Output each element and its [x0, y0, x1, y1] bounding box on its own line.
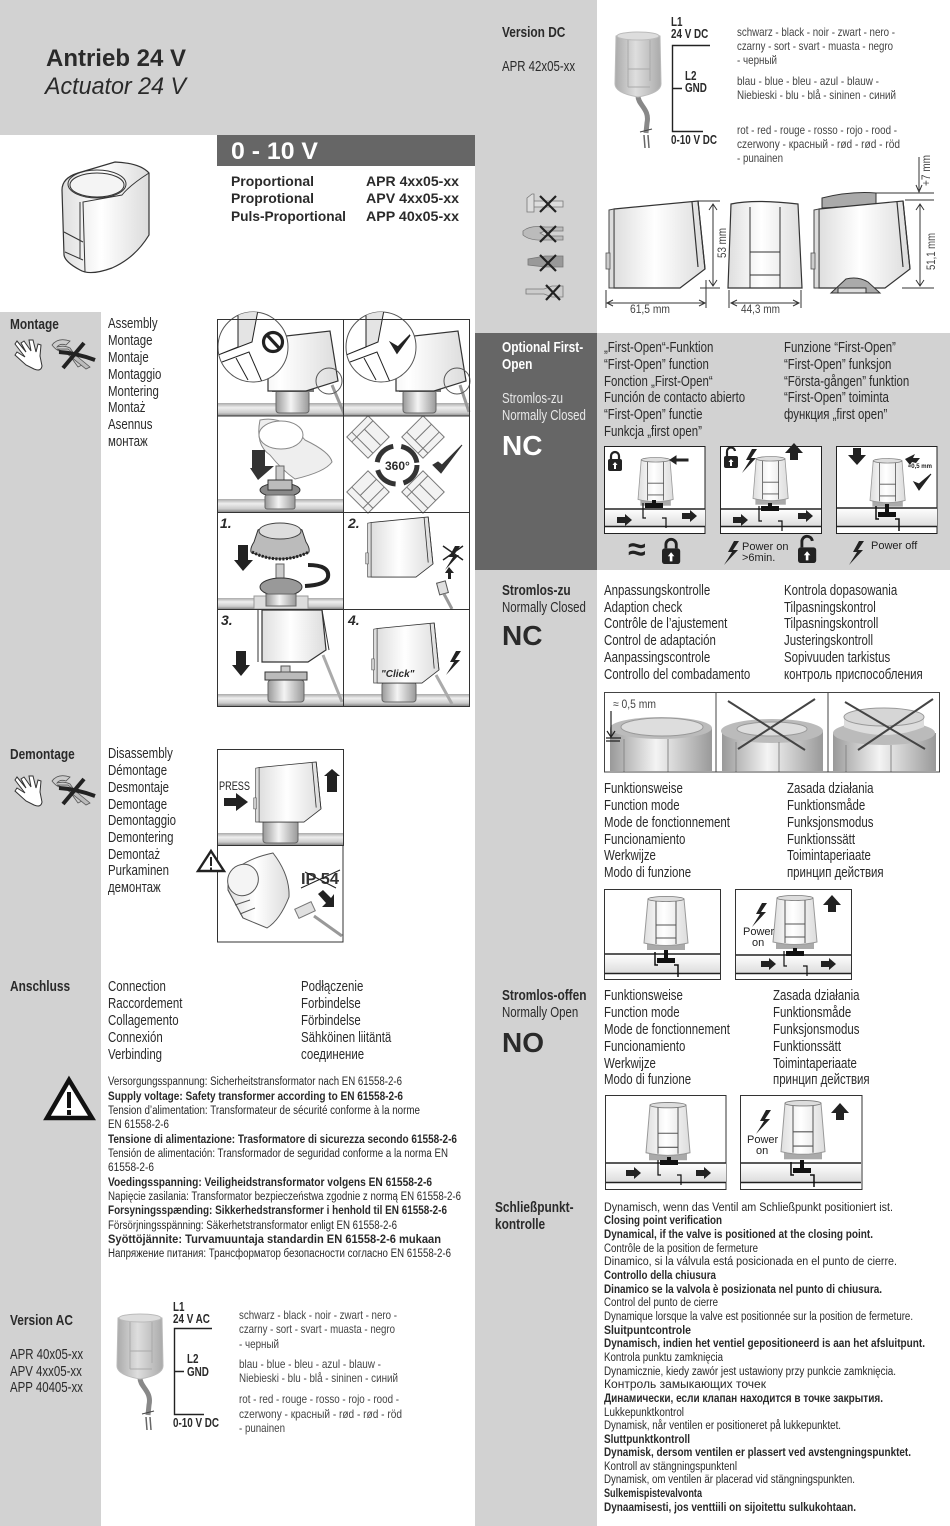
dimension drawing: section view with stroke: +7 mm	[919, 155, 933, 186]
wiring diagram: DC: L1	[671, 16, 683, 29]
text block: adaption check translations: Sopivuuden tarkistus	[784, 649, 891, 665]
text block: first-open translations: “First-Open” funksjon	[784, 356, 891, 372]
text block: function mode translations (NC): Modo di funzione	[604, 864, 691, 880]
wiring diagram: AC	[117, 1301, 219, 1430]
text block: adaption check translations: Kontrola dopasowania	[784, 582, 898, 598]
text block: assembly translations: Montaje	[108, 349, 149, 365]
text block: connection translations: Verbinding	[108, 1046, 162, 1062]
text block: AC wire colours: rot - red - rouge - rosso - rojo - rood -	[239, 1392, 399, 1406]
text block: disassembly translations	[108, 745, 176, 895]
text block: DC wire colours: czarny - sort - svart - muasta - negro	[737, 39, 893, 53]
heading: Stromlos-offen NO	[502, 987, 586, 1058]
text block: supply voltage safety note	[108, 1076, 461, 1260]
panel: NC valve power on: Power	[743, 926, 775, 938]
dimension drawing: side view	[606, 201, 729, 316]
panel: wrong cable mounting	[218, 310, 345, 416]
text block: closing point verification: Lukkepunktkontrol	[604, 1407, 684, 1419]
text block: function mode translations (NO): Mode de fonctionnement	[604, 1021, 730, 1037]
text block: AC wire colours: schwarz - black - noir - zwart - nero -	[239, 1308, 397, 1322]
panel: NO valve power on	[740, 1096, 862, 1190]
text block: closing point verification	[604, 1202, 925, 1514]
text block: assembly translations: Asennus	[108, 416, 153, 432]
text block: supply voltage safety note: Forsyningsspænding: Sikkerhedstransformer i henhold til EN 61558-2-6	[108, 1205, 447, 1217]
text block: closing point verification: Control del punto de cierre	[604, 1297, 718, 1309]
panel: correct cable mounting	[344, 310, 470, 416]
text block: closing point verification: Dinamico se la valvola è posizionata nel punto di chiusura.	[604, 1284, 882, 1296]
text block: function mode translations (NO): Funcionamiento	[604, 1038, 685, 1054]
dimension drawing: side view: 61,5 mm	[630, 302, 670, 316]
panel: NC valve power on: on	[752, 937, 764, 949]
panel: step 2: 2.	[347, 515, 360, 531]
panel: 360 degree rotation	[347, 416, 462, 513]
text block: DC wire colours: Niebieski - blu - blå - sininen - синий	[737, 88, 896, 102]
legend: first-open captions	[628, 531, 918, 567]
background: left column	[0, 312, 101, 1526]
text block: function mode translations (NO): Toimintaperiaate	[773, 1055, 857, 1071]
heading: Optional First-Open NC: Stromlos-zu	[502, 390, 563, 406]
text block: first-open translations: Funzione “First-Open”	[784, 339, 896, 355]
text block: connection translations: Raccordement	[108, 995, 183, 1011]
text block: DC wire colours: schwarz - black - noir - zwart - nero -	[737, 25, 895, 39]
text block: disassembly translations: Demontaż	[108, 846, 160, 862]
section heading: Montage: Montage	[10, 316, 59, 332]
title: Actuator 24 V	[43, 73, 188, 100]
text block: DC wire colours: czerwony - красный - rød - rød - röd	[737, 137, 900, 151]
panel: step 2	[347, 515, 463, 609]
illustration: adaption check cap positions: ≈ 0,5 mm	[613, 697, 656, 711]
text block: closing point verification: Sulkemispistevalvonta	[604, 1488, 702, 1500]
illustration: press and lift	[218, 750, 344, 846]
text block: disassembly translations: Desmontaje	[108, 779, 169, 795]
text block: closing point verification: Contrôle de la position de fermeture	[604, 1243, 758, 1255]
legend: first-open captions: Power on	[742, 541, 788, 553]
panel: NO valve power on: on	[756, 1145, 768, 1157]
panel: NC valve power on	[736, 890, 852, 980]
text block: first-open translations: „First-Open“-Funktion	[604, 339, 713, 355]
text block: connection translations: Sähköinen liitäntä	[301, 1029, 392, 1045]
text block: product types	[231, 173, 459, 224]
section heading: Demontage: Demontage	[10, 746, 75, 762]
text block: DC wire colours: rot - red - rouge - rosso - rojo - rood -	[737, 123, 897, 137]
text block: adaption check translations: контроль приспособления	[784, 666, 923, 682]
text block: function mode translations (NC): Funktionssätt	[787, 831, 855, 847]
text block: supply voltage safety note: Versorgungsspannung: Sicherheitstransformator nach EN 61558-2-6	[108, 1076, 402, 1088]
text block: function mode translations (NC): Mode de fonctionnement	[604, 814, 730, 830]
text block: closing point verification: Controllo della chiusura	[604, 1270, 717, 1282]
text block: first-open translations: Funkcja „first open”	[604, 423, 702, 439]
text block: closing point verification: Dynamicznie, kiedy zawór jest ustawiony przy punkcie zamknięcia.	[604, 1366, 896, 1378]
text block: disassembly translations: Demontering	[108, 829, 173, 845]
text block: disassembly translations: Démontage	[108, 762, 167, 778]
text block: product types: Proportional	[231, 173, 314, 189]
panel: first-open state locked	[604, 446, 705, 534]
panel grid lines	[218, 320, 470, 706]
heading bar: 0 - 10 V: 0 - 10 V	[231, 138, 318, 165]
text block: connection translations: Förbindelse	[301, 1012, 361, 1028]
text block: disassembly translations: Demontaggio	[108, 812, 176, 828]
text block: first-open translations: Fonction „First-Open“	[604, 373, 713, 389]
text block: closing point verification: Closing point verification	[604, 1215, 722, 1227]
text block: function mode translations (NO): Funktionssätt	[773, 1038, 841, 1054]
panel: step 1	[218, 515, 343, 609]
text block: closing point verification: Dynamisk, dersom ventilen er plassert ved avstengningspunktet.	[604, 1447, 911, 1459]
text block: AC wire colours	[239, 1308, 402, 1435]
text block: function mode translations (NC): Zasada działania	[787, 780, 874, 796]
background: right column	[475, 0, 597, 333]
panel: NO valve open	[606, 1096, 726, 1190]
text block: closing point verification: Kontroll av stängningspunktenl	[604, 1461, 737, 1473]
illustration: removed actuator, IP54 warning	[218, 846, 343, 942]
dimension drawing: section view with stroke: 51,1 mm	[924, 233, 938, 270]
heading: Schließpunktkontrolle	[495, 1199, 574, 1232]
icon: hand, no tools	[15, 340, 95, 370]
section heading: Version AC: Version AC	[10, 1312, 73, 1328]
text block: supply voltage safety note: Tension d’alimentation: Transformateur de sécurité conforme à la norme	[108, 1105, 420, 1117]
text block: DC wire colours: - черный	[737, 53, 777, 67]
title	[43, 45, 188, 100]
text block: adaption check translations: Control de adaptación	[604, 632, 716, 648]
text block: closing point verification: Dynamisk, når ventilen er positioneret på lukkepunktet.	[604, 1420, 841, 1432]
text block: function mode translations (NO): Modo di funzione	[604, 1071, 691, 1087]
heading: Stromlos-offen NO: Normally Open	[502, 1004, 578, 1020]
panel: first-open state power off: ≈0,5 mm	[908, 464, 932, 470]
legend: first-open captions: Power off	[871, 540, 918, 552]
legend: first-open captions: ≈	[628, 531, 646, 567]
dimension drawing: front view	[728, 202, 802, 316]
panel: NC valve closed	[604, 890, 720, 980]
text block: adaption check translations: Anpassungskontrolle	[604, 582, 710, 598]
wiring diagram: AC: GND	[187, 1366, 209, 1379]
heading: Stromlos-offen NO: Stromlos-offen	[502, 987, 586, 1003]
text block: function mode translations (NC): Funktionsweise	[604, 780, 683, 796]
panel: step 3: 3.	[221, 612, 233, 628]
text block: supply voltage safety note: EN 61558-2-6	[108, 1119, 169, 1131]
illustration: adaption check cap positions	[604, 692, 940, 772]
panel: 360 degree rotation: 360°	[385, 459, 410, 473]
panel: NO valve power on: Power	[747, 1134, 779, 1146]
text block: AC wire colours: czerwony - красный - rød - rød - röd	[239, 1407, 402, 1421]
heading: Stromlos-zu NC: Normally Closed	[502, 599, 586, 615]
icon: actuator product view	[62, 162, 149, 273]
text block: function mode translations (NC): Funksjonsmodus	[787, 814, 874, 830]
heading: Optional First-Open NC: NC	[502, 430, 542, 461]
text block: closing point verification: Dynamisch, wenn das Ventil am Schließpunkt positioniert ist.	[604, 1202, 893, 1214]
panel: step 4	[344, 612, 469, 706]
heading: Optional First-Open NC	[502, 339, 586, 461]
text block: closing point verification: Kontrola punktu zamknięcia	[604, 1352, 724, 1364]
heading: Schließpunktkontrolle: Schließpunkt-	[495, 1199, 574, 1215]
text block: function mode translations (NO): принцип действия	[773, 1071, 870, 1087]
text block: connection translations: Podłączenie	[301, 978, 363, 994]
text block: first-open translations: Función de contacto abierto	[604, 389, 745, 405]
text block: closing point verification: Dynamisk, om ventilen är placerad vid stängningspunkten.	[604, 1474, 855, 1486]
text block: function mode translations (NC): Funcionamiento	[604, 831, 685, 847]
wiring diagram: AC: L1	[173, 1301, 185, 1314]
text block: product types: Proprotional	[231, 190, 314, 206]
heading: Stromlos-zu NC: NC	[502, 620, 542, 651]
text block: AC wire colours: blau - blue - bleu - azul - blauw -	[239, 1357, 381, 1371]
text block: DC wire colours: blau - blue - bleu - azul - blauw -	[737, 74, 879, 88]
panel: step 3	[218, 610, 343, 706]
text block: first-open translations: “Första-gången” funktion	[784, 373, 909, 389]
text block: supply voltage safety note: Försörjningsspänning: Säkerhetstransformator enligt EN 61558-2-6	[108, 1220, 397, 1232]
text block: connection translations	[108, 978, 392, 1062]
text block: connection translations: Connection	[108, 978, 166, 994]
text block: supply voltage safety note: Напряжение питания: Трансформатор безопасности согласно EN 61558-2-6	[108, 1248, 451, 1260]
text block: function mode translations (NC): Werkwijze	[604, 847, 656, 863]
text block: first-open translations: функция „first open”	[784, 406, 887, 422]
heading: Stromlos-zu NC	[502, 582, 586, 651]
wiring diagram: AC: 0-10 V DC	[173, 1417, 219, 1430]
text block: adaption check translations	[604, 582, 923, 682]
text block: function mode translations (NO): Funktionsweise	[604, 987, 683, 1003]
panel: step 4: "Click"	[381, 669, 415, 680]
panel: first-open state power on	[720, 443, 822, 534]
text block: product types: APR 4xx05-xx	[366, 173, 459, 189]
text block: adaption check translations: Contrôle de l’ajustement	[604, 615, 728, 631]
wiring diagram: DC	[615, 16, 717, 148]
text block: function mode translations (NO): Funktionsmåde	[773, 1004, 851, 1020]
text block: AC wire colours: - черный	[239, 1337, 279, 1351]
text block: closing point verification: Контроль замыкающих точек	[604, 1379, 767, 1391]
dimension drawing: front view: 44,3 mm	[741, 302, 780, 316]
section heading: Version DC: Version DC	[502, 24, 566, 40]
wiring diagram: DC: GND	[685, 82, 707, 95]
text block: adaption check translations: Aanpassingscontrole	[604, 649, 710, 665]
text block: supply voltage safety note: Supply voltage: Safety transformer according to EN 61558-2-6	[108, 1091, 403, 1103]
text block: AC model numbers	[10, 1346, 84, 1395]
text block: AC model numbers: APR 40x05-xx	[10, 1346, 84, 1362]
text block: AC wire colours: - punainen	[239, 1421, 285, 1435]
text block: DC wire colours: - punainen	[737, 151, 783, 165]
text block: connection translations: соединение	[301, 1046, 364, 1062]
heading: Schließpunktkontrolle: kontrolle	[495, 1216, 545, 1232]
text block: supply voltage safety note: Napięcie zasilania: Transformator bezpieczeństwa zgodnie z normą EN 61558-2-6	[108, 1191, 461, 1203]
wiring diagram: AC: 24 V AC	[173, 1313, 210, 1326]
title: Antrieb 24 V	[46, 45, 186, 72]
text block: first-open translations: “First-Open” toiminta	[784, 389, 890, 405]
text block: closing point verification: Dynamical, if the valve is positioned at the closing point.	[604, 1229, 873, 1241]
wiring diagram: DC: 24 V DC	[671, 28, 708, 41]
text block: first-open translations: “First-Open” functie	[604, 406, 703, 422]
icon: hand, no tools (disassembly)	[15, 776, 95, 806]
text block: closing point verification: Sluitpuntcontrole	[604, 1325, 691, 1337]
illustration grid: assembly steps	[218, 310, 470, 706]
illustration: removed actuator, IP54 warning: IP 54	[301, 871, 339, 888]
dimension drawing: section view with stroke	[811, 155, 938, 293]
text block: closing point verification: Dynaamisesti, jos venttiili on sijoitettu sulkukohtaan.	[604, 1502, 856, 1514]
text block: closing point verification: Sluttpunktkontroll	[604, 1434, 690, 1446]
text block: supply voltage safety note: Voedingsspanning: Veiligheidstransformator volgens EN 61558-2-6	[108, 1177, 432, 1189]
text block: connection translations: Collagemento	[108, 1012, 179, 1028]
panel: first-open dark side block	[475, 333, 597, 570]
text block: supply voltage safety note: 61558-2-6	[108, 1162, 154, 1174]
text block: function mode translations (NO): Function mode	[604, 1004, 680, 1020]
text block: adaption check translations: Tilpasningskontroll	[784, 615, 878, 631]
panel: step 1: 1.	[220, 515, 232, 531]
text block: function mode translations (NC)	[604, 780, 884, 880]
text block: function mode translations (NC): Funktionsmåde	[787, 797, 865, 813]
text block: disassembly translations: Demontage	[108, 796, 167, 812]
text block: AC wire colours: Niebieski - blu - blå - sininen - синий	[239, 1371, 398, 1385]
text block: assembly translations: Montage	[108, 332, 153, 348]
heading: Stromlos-zu NC: Stromlos-zu	[502, 582, 571, 598]
icons: no tools (hammer, pliers, drill, screwdriver)	[523, 194, 563, 300]
text block: function mode translations (NC): Function mode	[604, 797, 680, 813]
text block: first-open translations	[604, 339, 909, 439]
heading: Optional First-Open NC: Normally Closed	[502, 407, 586, 423]
text block: AC wire colours: czarny - sort - svart - muasta - negro	[239, 1322, 395, 1336]
text block: adaption check translations: Justeringskontroll	[784, 632, 873, 648]
text block: closing point verification: Dinamico, si la válvula está posicionada en el punto de cierre.	[604, 1256, 897, 1268]
heading: Stromlos-offen NO: NO	[502, 1027, 544, 1058]
text block: assembly translations: монтаж	[108, 433, 148, 449]
text block: disassembly translations: Purkaminen	[108, 862, 169, 878]
text block: function mode translations (NO): Zasada działania	[773, 987, 860, 1003]
text block: assembly translations	[108, 315, 161, 449]
icon: small warning triangle	[198, 851, 224, 871]
text block: assembly translations: Montaż	[108, 399, 146, 415]
wiring diagram: DC: 0-10 V DC	[671, 134, 717, 147]
text block: supply voltage safety note: Syöttöjännite: Turvamuuntaja standardin EN 61558-2-6 mukaan	[108, 1234, 441, 1246]
text block: disassembly translations: Disassembly	[108, 745, 173, 761]
text block: first-open translations: “First-Open” function	[604, 356, 709, 372]
text block: adaption check translations: Tilpasningskontrol	[784, 599, 876, 615]
text block: product types: Puls-Proportional	[231, 208, 346, 224]
text block: adaption check translations: Adaption check	[604, 599, 683, 615]
text block: supply voltage safety note: Tensión de alimentación: Transformador de seguridad conforme a la norma EN	[108, 1148, 448, 1160]
text block: DC model number: APR 42x05-xx	[502, 58, 576, 74]
background: header band	[0, 0, 475, 135]
illustration: press and lift: PRESS	[219, 781, 250, 793]
text block: function mode translations (NC): Toimintaperiaate	[787, 847, 871, 863]
section heading: Anschluss: Anschluss	[10, 978, 70, 994]
panel: adapter ring placement	[218, 419, 343, 512]
panel: first-open grey content block	[597, 333, 950, 570]
text block: connection translations: Connexión	[108, 1029, 163, 1045]
legend: first-open captions: >6min.	[742, 552, 775, 564]
wiring diagram: DC: L2	[685, 70, 697, 83]
heading bar: 0 - 10 V	[217, 135, 475, 166]
text block: function mode translations (NC): принцип действия	[787, 864, 884, 880]
text block: AC model numbers: APV 4xx05-xx	[10, 1363, 82, 1379]
text block: function mode translations (NO)	[604, 987, 870, 1087]
background: right column lower	[475, 570, 597, 1526]
text block: product types: APV 4xx05-xx	[366, 190, 459, 206]
text block: assembly translations: Montaggio	[108, 366, 161, 382]
heading: Optional First-Open NC: Open	[502, 356, 532, 372]
text block: closing point verification: Динамически, если клапан находится в точке закрытия.	[604, 1393, 883, 1405]
panel: step 4: 4.	[347, 612, 360, 628]
dimension drawing: side view: 53 mm	[715, 228, 729, 258]
text block: function mode translations (NO): Werkwijze	[604, 1055, 656, 1071]
text block: connection translations: Forbindelse	[301, 995, 361, 1011]
heading: Optional First-Open NC: Optional First-	[502, 339, 583, 355]
text block: AC model numbers: APP 40405-xx	[10, 1379, 83, 1395]
text block: adaption check translations: Controllo del combadamento	[604, 666, 750, 682]
panel: first-open state power off	[836, 446, 937, 534]
wiring diagram: AC: L2	[187, 1353, 199, 1366]
text block: DC wire colours	[737, 25, 900, 165]
text block: supply voltage safety note: Tensione di alimentazione: Trasformatore di sicurezza secondo 61558-2-6	[108, 1134, 457, 1146]
text block: assembly translations: Montering	[108, 383, 159, 399]
text block: function mode translations (NO): Funksjonsmodus	[773, 1021, 860, 1037]
text block: disassembly translations: демонтаж	[108, 879, 161, 895]
text block: assembly translations: Assembly	[108, 315, 158, 331]
text block: product types: APP 40x05-xx	[366, 208, 459, 224]
icon: warning triangle	[47, 1080, 92, 1118]
